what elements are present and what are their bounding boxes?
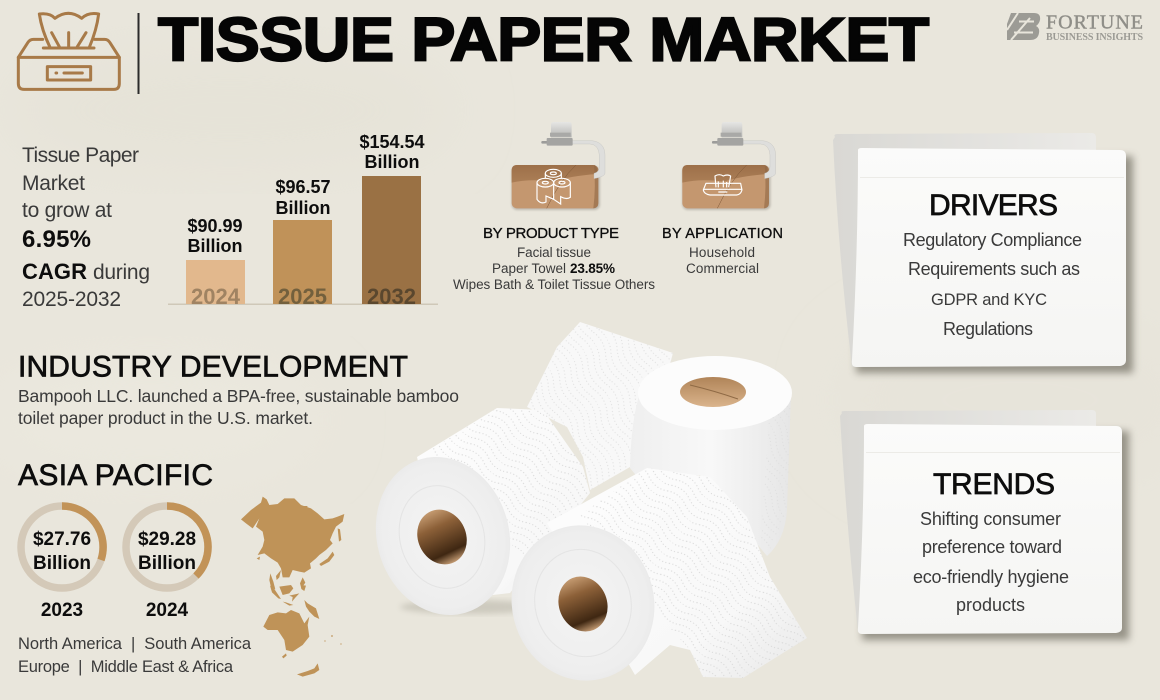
bar 2024: $90.99 (187, 216, 243, 236)
text block: trends: Shifting consumer (920, 509, 1061, 529)
left roll (358, 408, 590, 631)
bar 2032: Billion (364, 152, 420, 172)
donut: 2023: $27.76 (33, 529, 91, 550)
heading: trends: TRENDS (933, 468, 1055, 501)
text block: growth statement: during (93, 261, 150, 284)
text block: trends: eco-friendly hygiene (913, 567, 1069, 587)
donut: 2024: 2024 (146, 600, 189, 621)
heading: asia pacific: ASIA PACIFIC (18, 459, 213, 492)
logo: Fortune Business Insights (1007, 12, 1143, 43)
list: applications: Household (689, 245, 755, 260)
bar chart: market size (168, 132, 438, 309)
text block: growth statement: to grow at (22, 199, 112, 222)
text block: other regions (18, 635, 252, 676)
list: product types: Wipes Bath & Toilet Tissue Others (453, 277, 655, 292)
logo: Fortune Business Insights: BUSINESS INSIGHTS (1046, 32, 1143, 43)
title: TISSUE PAPER MARKET (158, 7, 929, 74)
donut: 2024: Billion (138, 553, 196, 574)
text block: industry development: toilet paper product in the U.S. market. (18, 408, 313, 428)
list: product types (453, 245, 655, 292)
list: applications: Commercial (686, 261, 759, 276)
panel: trends (840, 410, 1129, 640)
donut: 2023 (21, 506, 103, 621)
list: applications (686, 245, 759, 276)
bar 2032: 2032 (367, 284, 416, 309)
text block: other regions: Europe | Middle East & Africa (18, 658, 234, 676)
text block: trends: products (956, 595, 1025, 615)
bar 2024: 2024 (191, 284, 241, 309)
bar 2025: 2025 (278, 284, 327, 309)
text block: growth statement: 6.95% (22, 226, 91, 253)
bar 2032: $154.54 (359, 132, 425, 152)
text block: industry development (18, 386, 459, 428)
bar 2024: Billion (188, 236, 242, 256)
text block: drivers: Regulations (943, 319, 1033, 339)
bar 2025: Billion (276, 198, 330, 218)
bar 2025 (273, 177, 332, 309)
panel: drivers (833, 133, 1133, 373)
text block: trends (913, 509, 1069, 615)
label: by application: BY APPLICATION (662, 226, 783, 242)
heading: industry development: INDUSTRY DEVELOPMENT (18, 350, 408, 384)
upright roll (630, 356, 792, 556)
text block: growth statement (22, 144, 150, 311)
icon: roll dispenser with tissue box (682, 122, 776, 210)
label: by product type: BY PRODUCT TYPE (483, 225, 619, 242)
text block: drivers: GDPR and KYC (931, 291, 1047, 309)
header divider (138, 13, 140, 94)
segment: by application (662, 122, 783, 276)
logo: Fortune Business Insights: FORTUNE (1046, 12, 1143, 34)
text block: growth statement: 2025-2032 (22, 288, 121, 311)
bar 2032 (359, 132, 425, 309)
heading: drivers: DRIVERS (929, 189, 1058, 222)
list: product types: 23.85% (570, 261, 615, 276)
front roll (495, 468, 807, 696)
list: product types: Paper Towel (492, 261, 566, 276)
text block: growth statement: Market (22, 172, 85, 195)
donut: 2023: Billion (33, 553, 91, 574)
text block: growth statement: Tissue Paper (22, 144, 139, 167)
segment: by product type (453, 122, 655, 292)
back paper sheet (527, 322, 673, 490)
text block: other regions: North America | South America (18, 635, 252, 653)
donut: 2024 (126, 506, 208, 621)
text block: drivers: Regulatory Compliance (903, 230, 1082, 250)
icon: roll dispenser with rolls (512, 122, 605, 210)
text block: industry development: Bampooh LLC. launched a BPA-free, sustainable bamboo (18, 386, 459, 406)
text block: growth statement: CAGR (22, 259, 87, 284)
icon: tissue box (18, 13, 119, 89)
donut: 2024: $29.28 (138, 529, 196, 550)
bar 2024 (186, 216, 245, 309)
list: product types: Facial tissue (517, 245, 591, 260)
donut: 2023: 2023 (41, 600, 83, 621)
text block: drivers: Requirements such as (908, 259, 1080, 279)
map: asia pacific (241, 497, 344, 677)
text block: trends: preference toward (922, 537, 1062, 557)
illustration: toilet paper rolls (358, 322, 807, 696)
bar 2025: $96.57 (275, 177, 331, 197)
text block: drivers (903, 230, 1082, 339)
